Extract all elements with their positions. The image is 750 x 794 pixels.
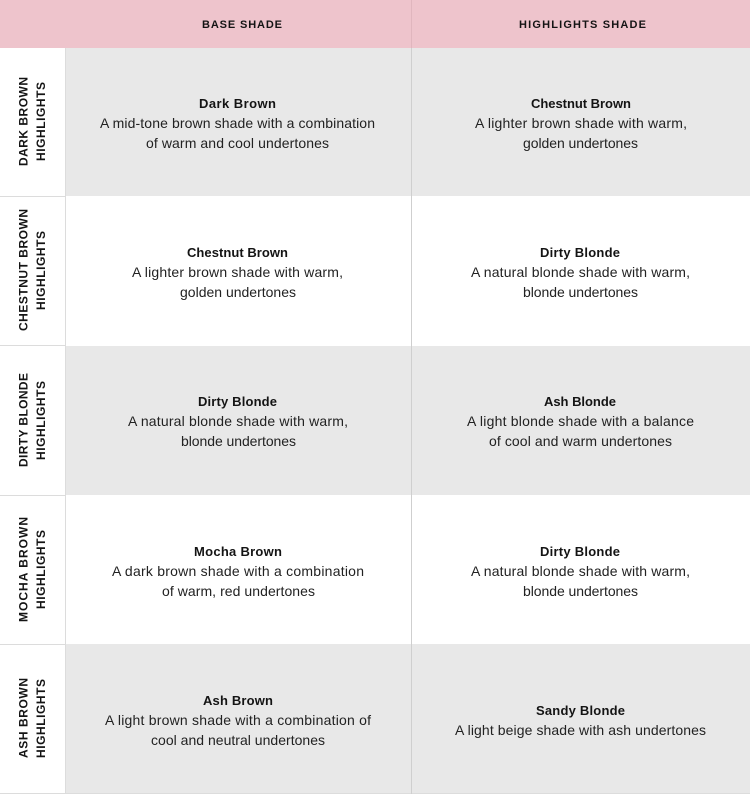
row label: dark brown highlights [16, 77, 48, 166]
cell: mocha brown base [112, 544, 364, 599]
row label: ash brown highlights: HIGHLIGHTS [34, 679, 48, 758]
cell: chestnut brown highlight: A lighter brown shade with warm, [475, 115, 687, 131]
row label: dark brown highlights: HIGHLIGHTS [34, 82, 48, 161]
cell: dirty blonde base: A natural blonde shade with warm, [128, 413, 348, 429]
cell: sandy blonde highlight: Sandy Blonde [536, 703, 625, 718]
cell: dark brown base: A mid-tone brown shade with a combination [100, 115, 375, 131]
cell: chestnut brown base: A lighter brown shade with warm, [132, 264, 343, 280]
cell: ash brown base [105, 693, 371, 748]
panel: row 5 background [65, 644, 750, 793]
cell: chestnut brown base [132, 245, 343, 300]
cell: dirty blonde highlight: A natural blonde shade with warm, [471, 264, 690, 280]
cell: chestnut brown highlight: golden undertones [523, 135, 638, 151]
heading: highlights shade: HIGHLIGHTS SHADE [519, 19, 646, 31]
cell: ash blonde highlight: Ash Blonde [544, 394, 616, 409]
cell: dirty blonde highlight (mocha row): Dirty Blonde [540, 544, 620, 559]
cell: dirty blonde highlight (mocha row) [471, 544, 690, 599]
cell: chestnut brown highlight [475, 96, 687, 151]
row label: chestnut brown highlights [16, 209, 48, 331]
cell: ash blonde highlight [467, 394, 694, 449]
row label: ash brown highlights: ASH BROWN [16, 678, 30, 758]
cell: sandy blonde highlight [455, 703, 706, 738]
row label: dirty blonde highlights: HIGHLIGHTS [34, 381, 48, 460]
cell: ash brown base: cool and neutral undertones [151, 732, 325, 748]
cell: dirty blonde base: Dirty Blonde [198, 394, 277, 409]
cell: dirty blonde highlight [471, 245, 690, 300]
cell: chestnut brown highlight: Chestnut Brown [531, 96, 631, 111]
cell: dirty blonde base: blonde undertones [181, 433, 296, 449]
cell: mocha brown base: of warm, red undertones [162, 583, 315, 599]
row label: dirty blonde highlights: DIRTY BLONDE [16, 373, 30, 467]
cell: dark brown base [100, 96, 375, 151]
cell: chestnut brown base: golden undertones [180, 284, 296, 300]
cell: dark brown base: Dark Brown [199, 96, 276, 111]
cell: dirty blonde base [128, 394, 348, 449]
cell: ash blonde highlight: A light blonde shade with a balance [467, 413, 694, 429]
cell: ash brown base: A light brown shade with a combination of [105, 712, 371, 728]
header band [0, 0, 750, 48]
row label: dark brown highlights: DARK BROWN [16, 77, 30, 166]
cell: ash blonde highlight: of cool and warm undertones [489, 433, 672, 449]
row label: ash brown highlights [16, 678, 48, 758]
row label: chestnut brown highlights: HIGHLIGHTS [34, 231, 48, 310]
cell: mocha brown base: A dark brown shade with a combination [112, 563, 364, 579]
cell: dirty blonde highlight: Dirty Blonde [540, 245, 620, 260]
row label: chestnut brown highlights: CHESTNUT BROWN [16, 209, 30, 331]
cell: dirty blonde highlight (mocha row): A natural blonde shade with warm, [471, 563, 690, 579]
cell: dirty blonde highlight: blonde undertones [523, 284, 638, 300]
cell: dirty blonde highlight (mocha row): blonde undertones [523, 583, 638, 599]
heading: base shade: BASE SHADE [202, 19, 282, 31]
row label: mocha brown highlights: MOCHA BROWN [16, 517, 30, 622]
row label: mocha brown highlights [16, 517, 48, 622]
panel: row 1 background [65, 48, 750, 196]
cell: chestnut brown base: Chestnut Brown [187, 245, 288, 260]
row label: mocha brown highlights: HIGHLIGHTS [34, 530, 48, 609]
cell: dark brown base: of warm and cool undertones [146, 135, 329, 151]
panel: row 3 background [65, 346, 750, 495]
cell: sandy blonde highlight: A light beige shade with ash undertones [455, 722, 706, 738]
row label: dirty blonde highlights [16, 373, 48, 467]
cell: ash brown base: Ash Brown [203, 693, 273, 708]
cell: mocha brown base: Mocha Brown [194, 544, 282, 559]
